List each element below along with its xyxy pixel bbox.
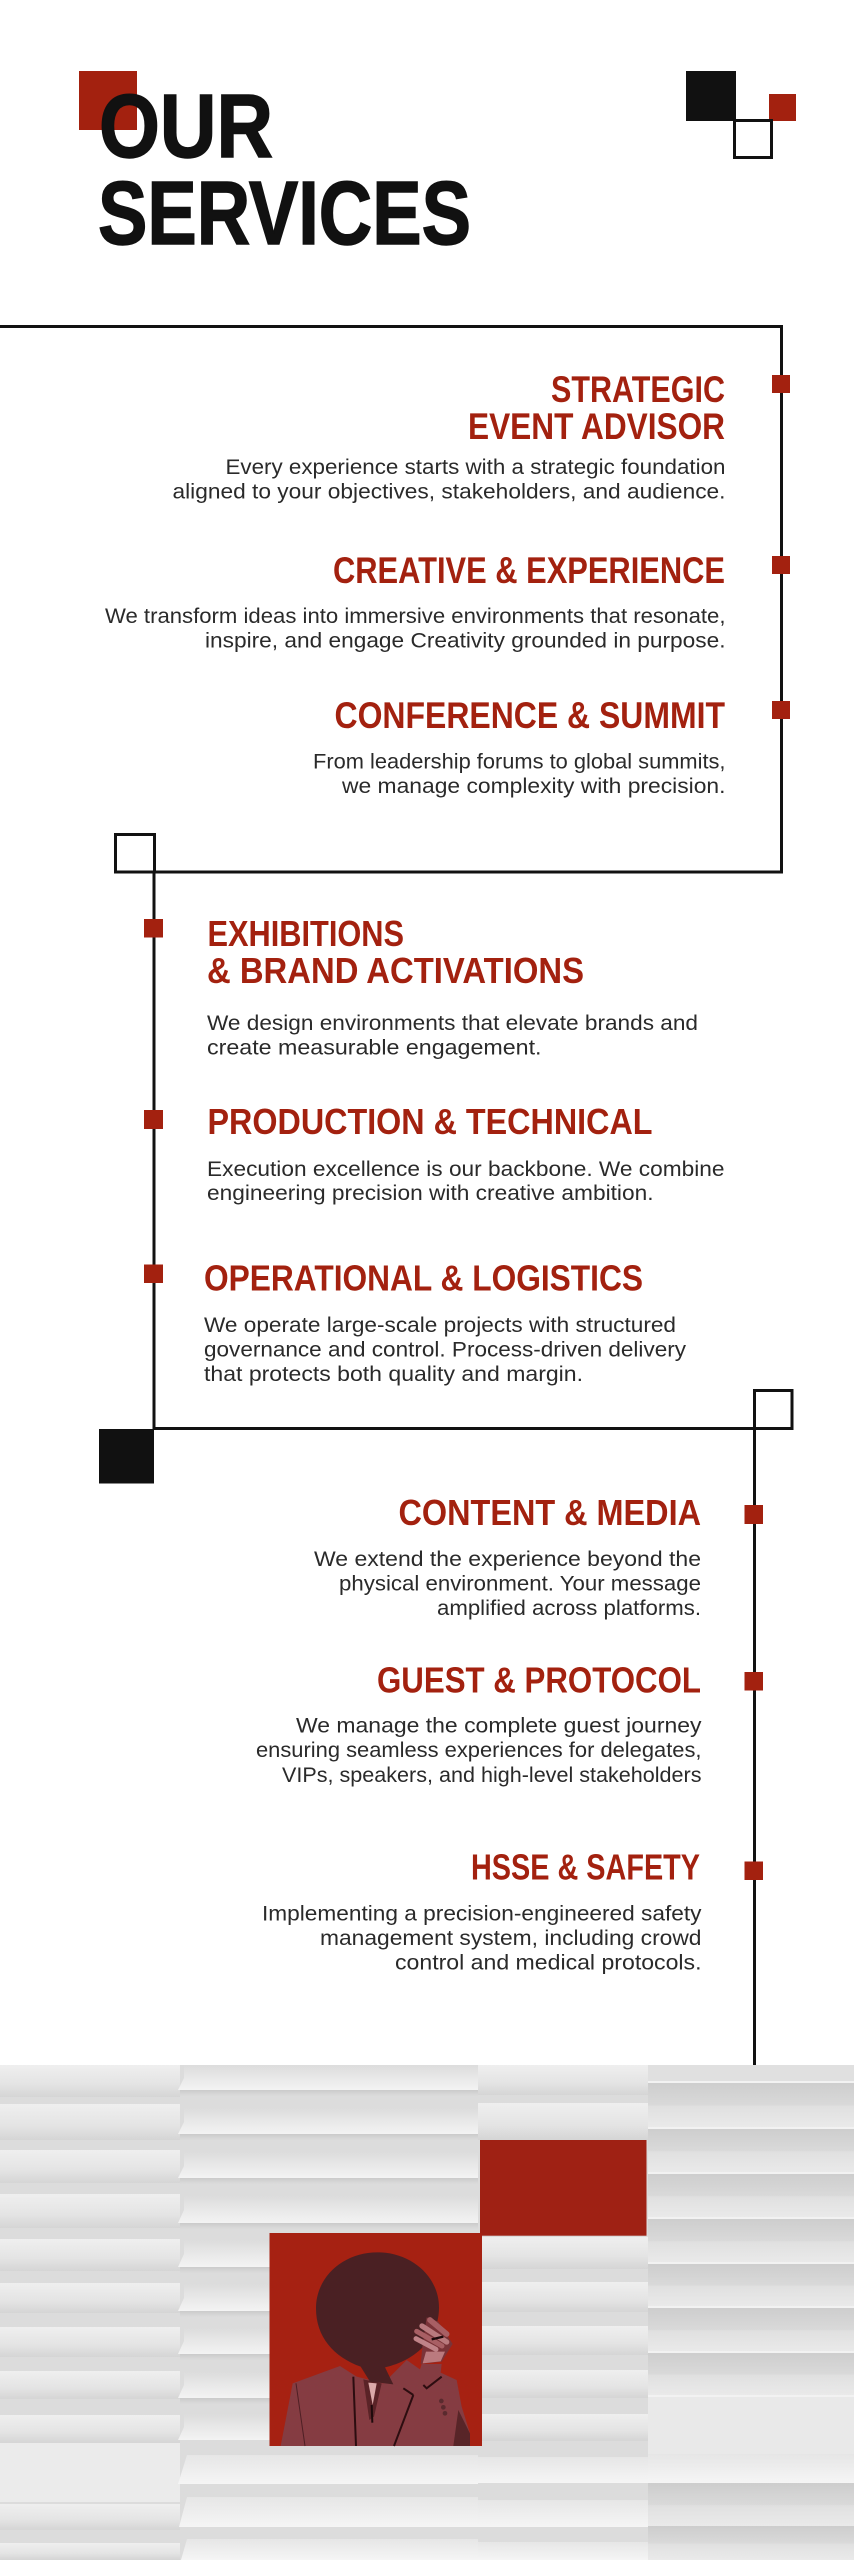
jacket lapel lines [353, 2377, 442, 2446]
marker [144, 1110, 163, 1129]
description: Execution excellence is our backbone. We combine [207, 1157, 724, 1181]
description [207, 1011, 698, 1060]
title: OUR [99, 77, 273, 177]
description: inspire, and engage Creativity grounded in purpose. [205, 628, 726, 652]
marker [772, 701, 790, 719]
service: content and media [314, 1492, 763, 1620]
heading: & BRAND ACTIVATIONS [207, 950, 584, 991]
speech bubble [316, 2252, 439, 2384]
description: We manage the complete guest journey [296, 1714, 702, 1738]
icon: top-right squares [686, 71, 796, 158]
heading: EVENT ADVISOR [468, 406, 725, 447]
description: We extend the experience beyond the [314, 1547, 701, 1571]
sleeve shadow [453, 2410, 470, 2446]
service: guest and protocol [256, 1660, 763, 1787]
description [207, 1157, 724, 1205]
marker [772, 375, 790, 393]
description: management system, including crowd [320, 1926, 702, 1950]
heading: CREATIVE & EXPERIENCE [333, 550, 725, 591]
marker [744, 1672, 763, 1690]
heading: GUEST & PROTOCOL [377, 1660, 701, 1700]
decorative red square behind title [79, 71, 137, 130]
description [256, 1714, 702, 1787]
heading: OPERATIONAL & LOGISTICS [204, 1258, 643, 1298]
marker [744, 1505, 763, 1524]
heading: CONFERENCE & SUMMIT [334, 695, 725, 736]
description: Every experience starts with a strategic foundation [226, 455, 726, 479]
title: SERVICES [98, 164, 471, 264]
description [172, 455, 726, 504]
heading: EXHIBITIONS [208, 913, 404, 954]
shirt [363, 2379, 382, 2420]
hand [416, 2317, 453, 2364]
description: we manage complexity with precision. [341, 774, 726, 798]
description: Implementing a precision-engineered safety [262, 1902, 702, 1926]
heading: HSSE & SAFETY [471, 1846, 700, 1888]
description [314, 1547, 701, 1620]
black square at line corner [99, 1429, 154, 1484]
description: physical environment. Your message [339, 1572, 701, 1596]
marker [144, 1264, 163, 1283]
marker [772, 556, 790, 574]
heading: STRATEGIC [551, 369, 725, 410]
description: amplified across platforms. [437, 1596, 701, 1620]
connector line: frame and timeline [0, 326, 792, 2065]
description [204, 1313, 686, 1386]
jacket sleeve line [296, 2383, 305, 2446]
description [105, 604, 726, 652]
jacket buttons [439, 2399, 447, 2416]
service: exhibitions and brand activations [144, 913, 698, 1060]
zipper [369, 2405, 375, 2423]
description [262, 1902, 702, 1974]
description: create measurable engagement. [207, 1036, 542, 1060]
service: production and technical [144, 1101, 724, 1205]
heading [468, 369, 725, 447]
description [313, 750, 726, 798]
description: control and medical protocols. [395, 1950, 702, 1974]
description: We design environments that elevate brands and [207, 1011, 698, 1035]
heading [207, 913, 584, 991]
red square on photo [480, 2140, 646, 2236]
marker [144, 919, 163, 938]
description: governance and control. Process-driven delivery [204, 1338, 686, 1362]
service: conference and summit [313, 695, 790, 798]
description: aligned to your objectives, stakeholders, and audience. [172, 480, 726, 504]
photo panel: figure holding speech bubble [270, 2233, 482, 2446]
marker [744, 1862, 763, 1880]
heading: CONTENT & MEDIA [398, 1492, 701, 1533]
service: creative and experience [105, 550, 790, 652]
description: ensuring seamless experiences for delegates, [256, 1738, 702, 1762]
heading: PRODUCTION & TECHNICAL [208, 1101, 652, 1142]
description: that protects both quality and margin. [204, 1362, 583, 1386]
service: hsse and safety [262, 1846, 763, 1974]
service: strategic event advisor [172, 369, 790, 504]
photo background: folded white paper [0, 2065, 854, 2560]
description: VIPs, speakers, and high-level stakeholders [282, 1763, 702, 1787]
title [98, 77, 471, 264]
description: We operate large-scale projects with structured [204, 1313, 676, 1337]
service: operational and logistics [144, 1258, 686, 1386]
description: engineering precision with creative ambition. [207, 1181, 654, 1205]
description: We transform ideas into immersive environments that resonate, [105, 604, 726, 628]
jacket [281, 2360, 470, 2446]
description: From leadership forums to global summits, [313, 750, 726, 774]
shirt collar [368, 2383, 377, 2405]
